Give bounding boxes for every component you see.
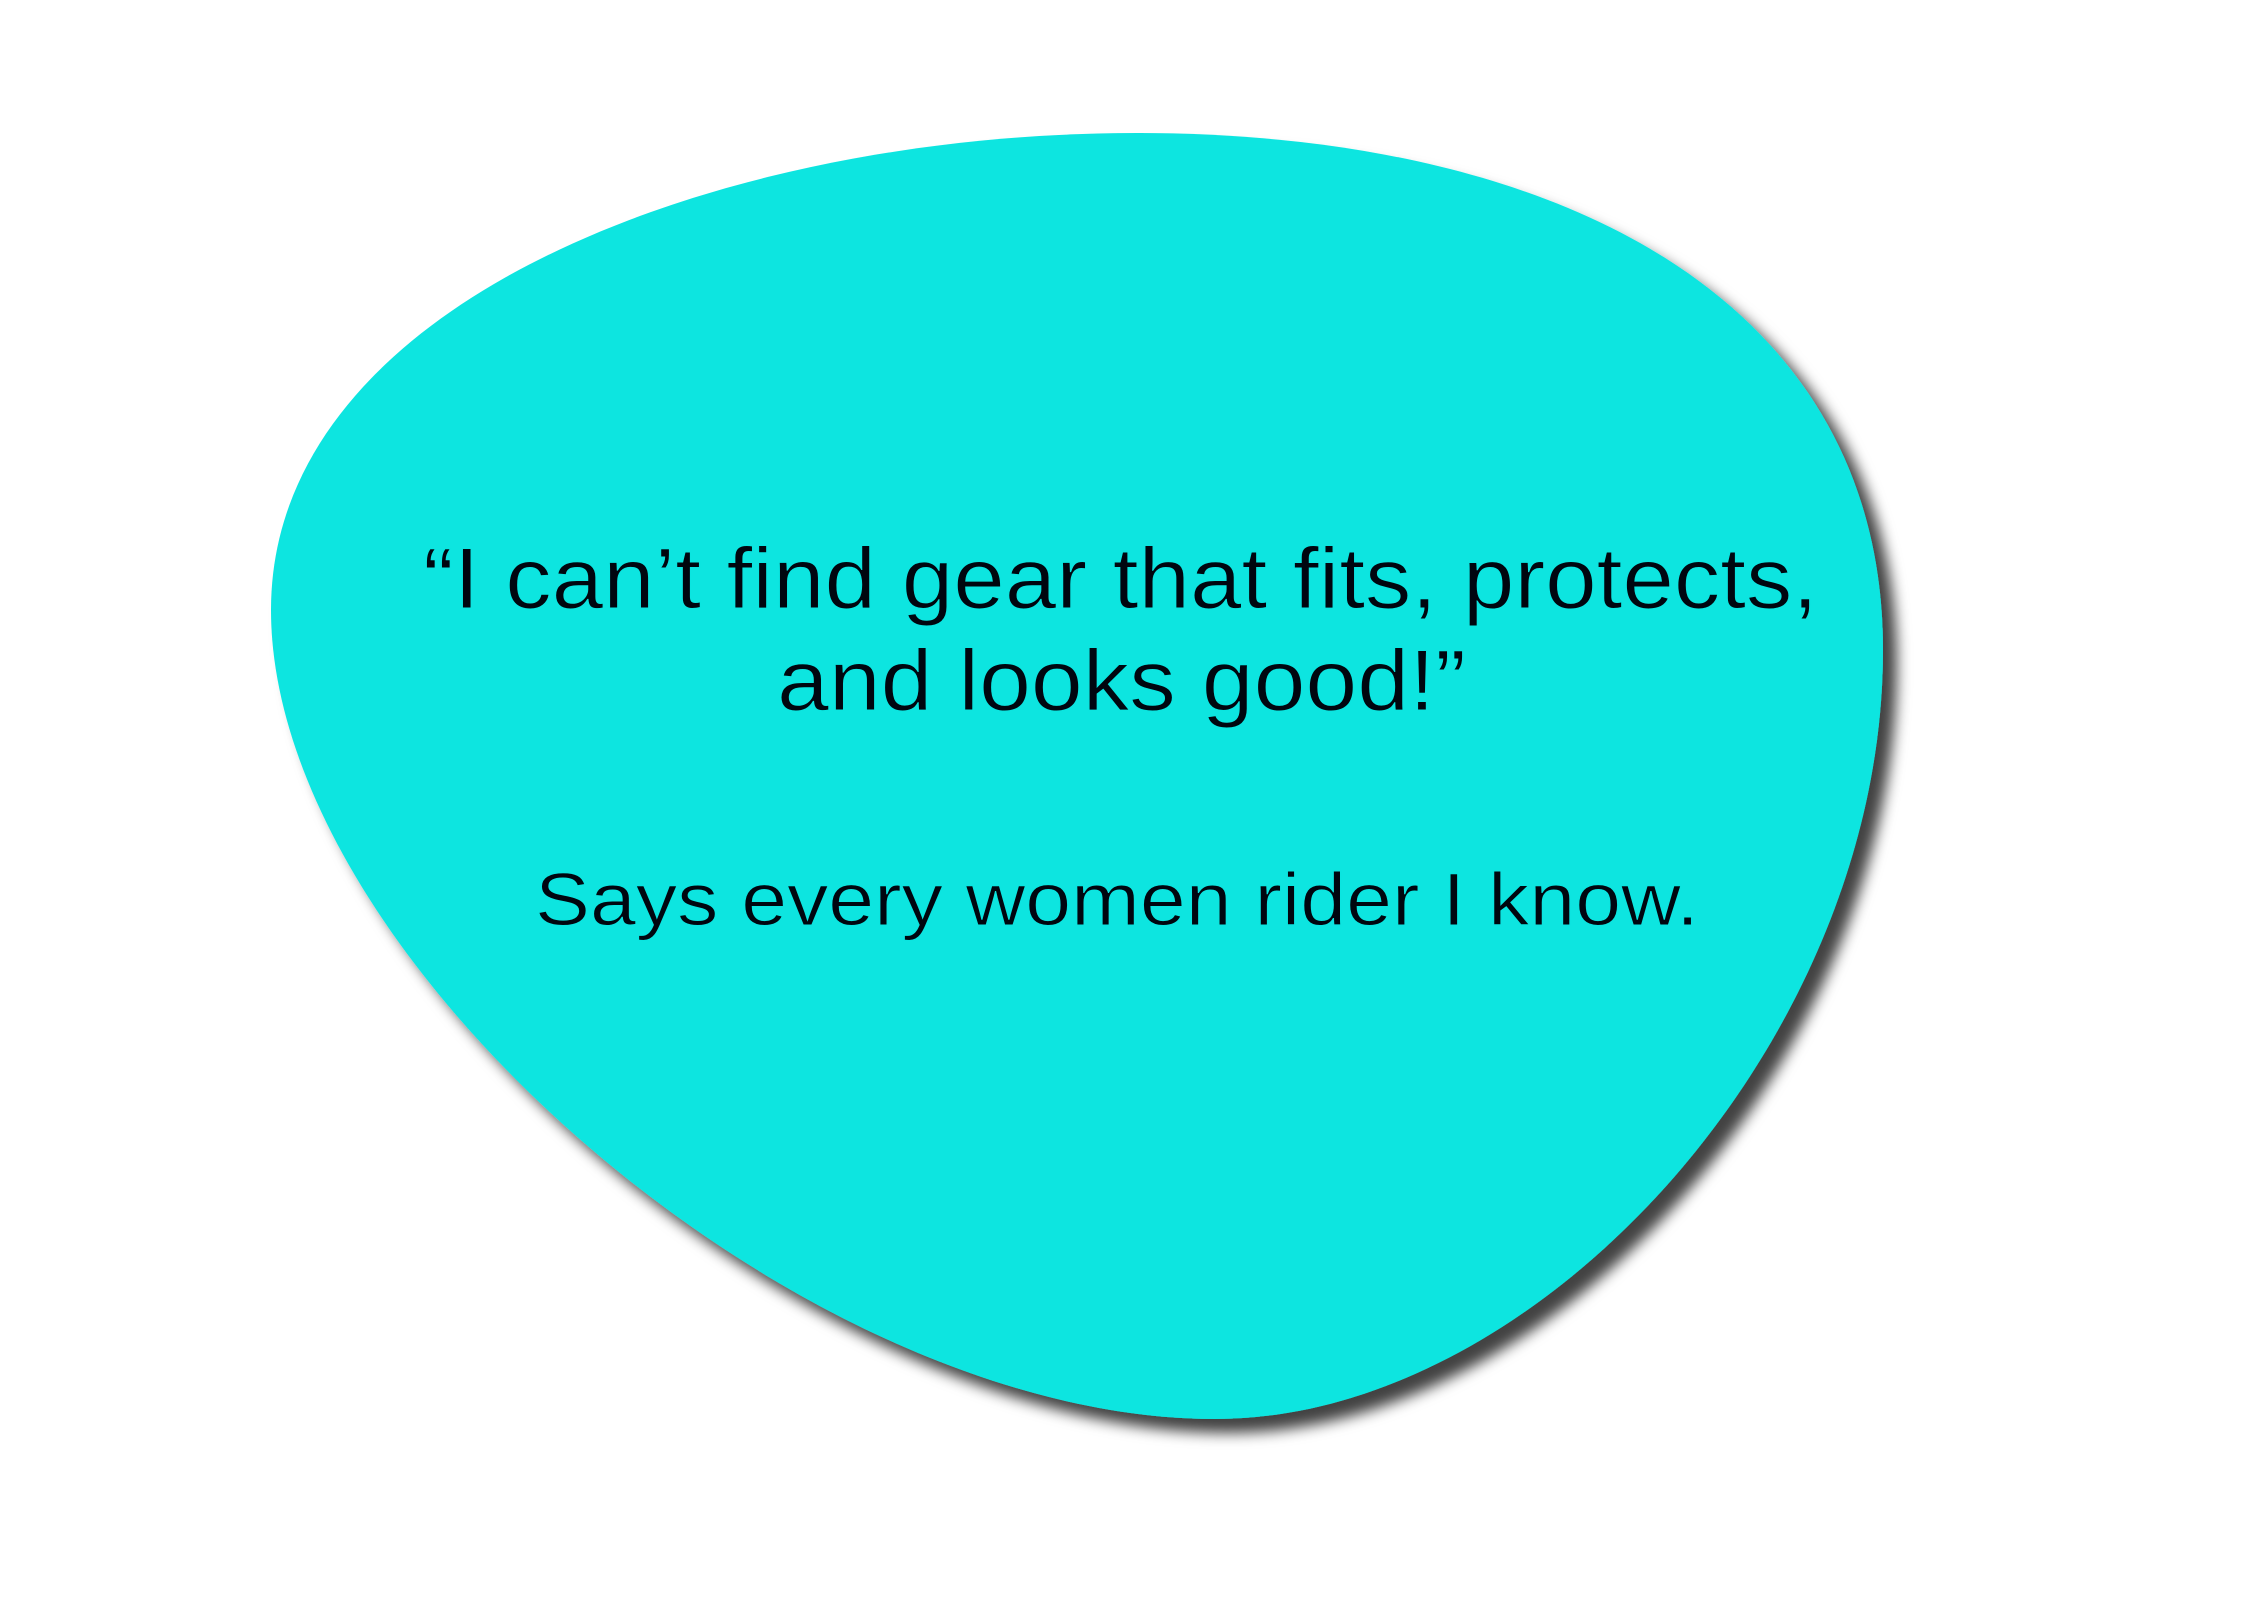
quote text: and looks good!” [777, 633, 1466, 729]
quote text [423, 531, 1818, 729]
attribution text: Says every women rider I know. [535, 858, 1699, 941]
panel: teal quote blob [271, 133, 1883, 1419]
quote text: “I can’t find gear that fits, protects, [423, 531, 1818, 627]
